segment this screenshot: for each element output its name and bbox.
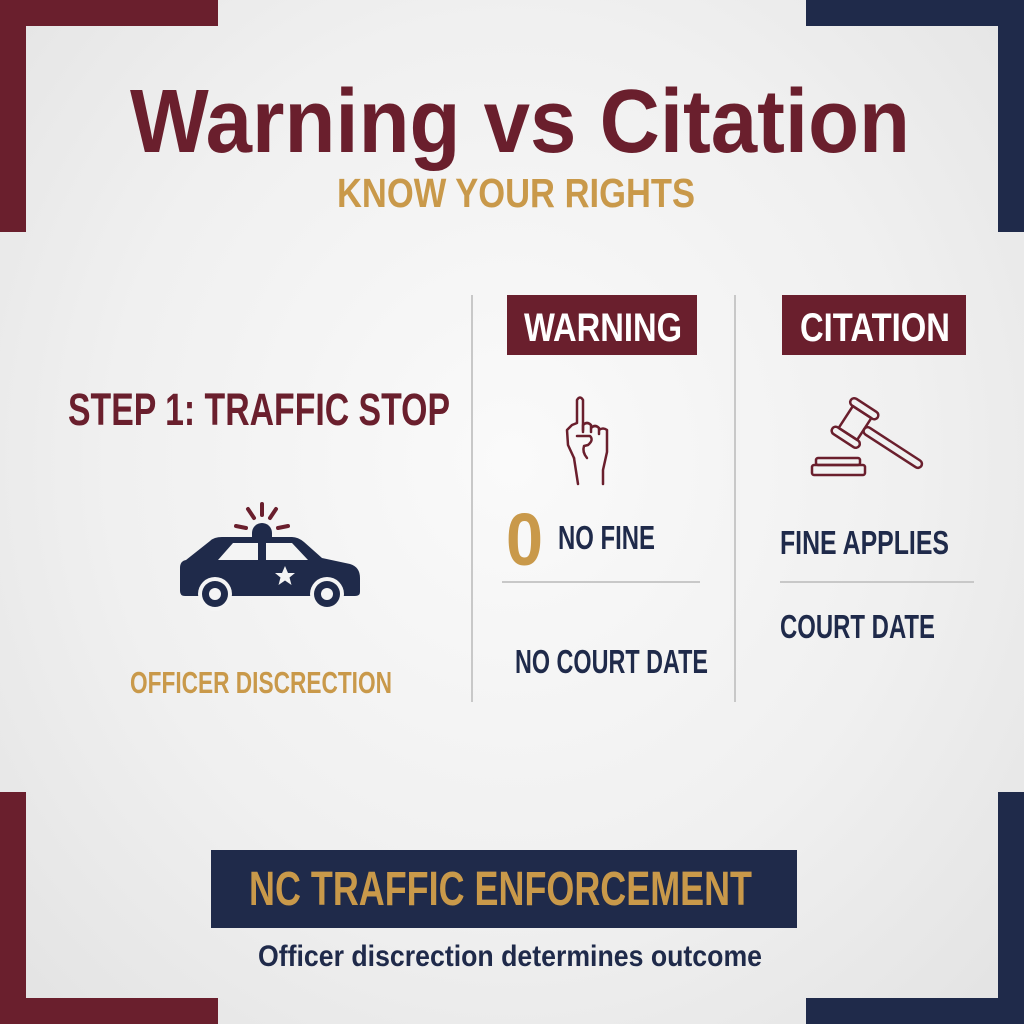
corner bracket: top-left (0, 0, 218, 232)
column dividers (472, 295, 735, 702)
text: no court date: NO COURT DATE (515, 643, 708, 680)
heading: step 1: STEP 1: TRAFFIC STOP (68, 384, 450, 435)
banner: NC traffic enforcement: NC TRAFFIC ENFORCEMENT (249, 863, 752, 916)
corner bracket: top-right (806, 0, 1024, 232)
title: Warning vs Citation (130, 72, 910, 172)
corner bracket: bottom-left (0, 792, 218, 1024)
icon: police car (180, 504, 360, 611)
header: citation (782, 295, 966, 355)
text: fine applies: FINE APPLIES (780, 524, 949, 561)
text: court date: COURT DATE (780, 608, 935, 645)
header: warning: WARNING (524, 306, 682, 350)
header: warning (507, 295, 697, 355)
caption: officer discretion: OFFICER DISCRECTION (130, 665, 392, 700)
banner: NC traffic enforcement (211, 850, 797, 928)
footer text: Officer discrection determines outcome (258, 940, 762, 973)
panel: warning (502, 295, 708, 680)
panel: step 1 (68, 384, 450, 700)
icon: raised finger hand (567, 398, 607, 484)
stat: zero: 0 (506, 498, 543, 581)
panel: citation (780, 295, 974, 645)
subtitle: KNOW YOUR RIGHTS (337, 170, 695, 216)
corner bracket: bottom-right (806, 792, 1024, 1024)
header: citation: CITATION (800, 306, 950, 350)
text: no fine: NO FINE (558, 519, 655, 556)
icon: gavel (812, 397, 933, 484)
